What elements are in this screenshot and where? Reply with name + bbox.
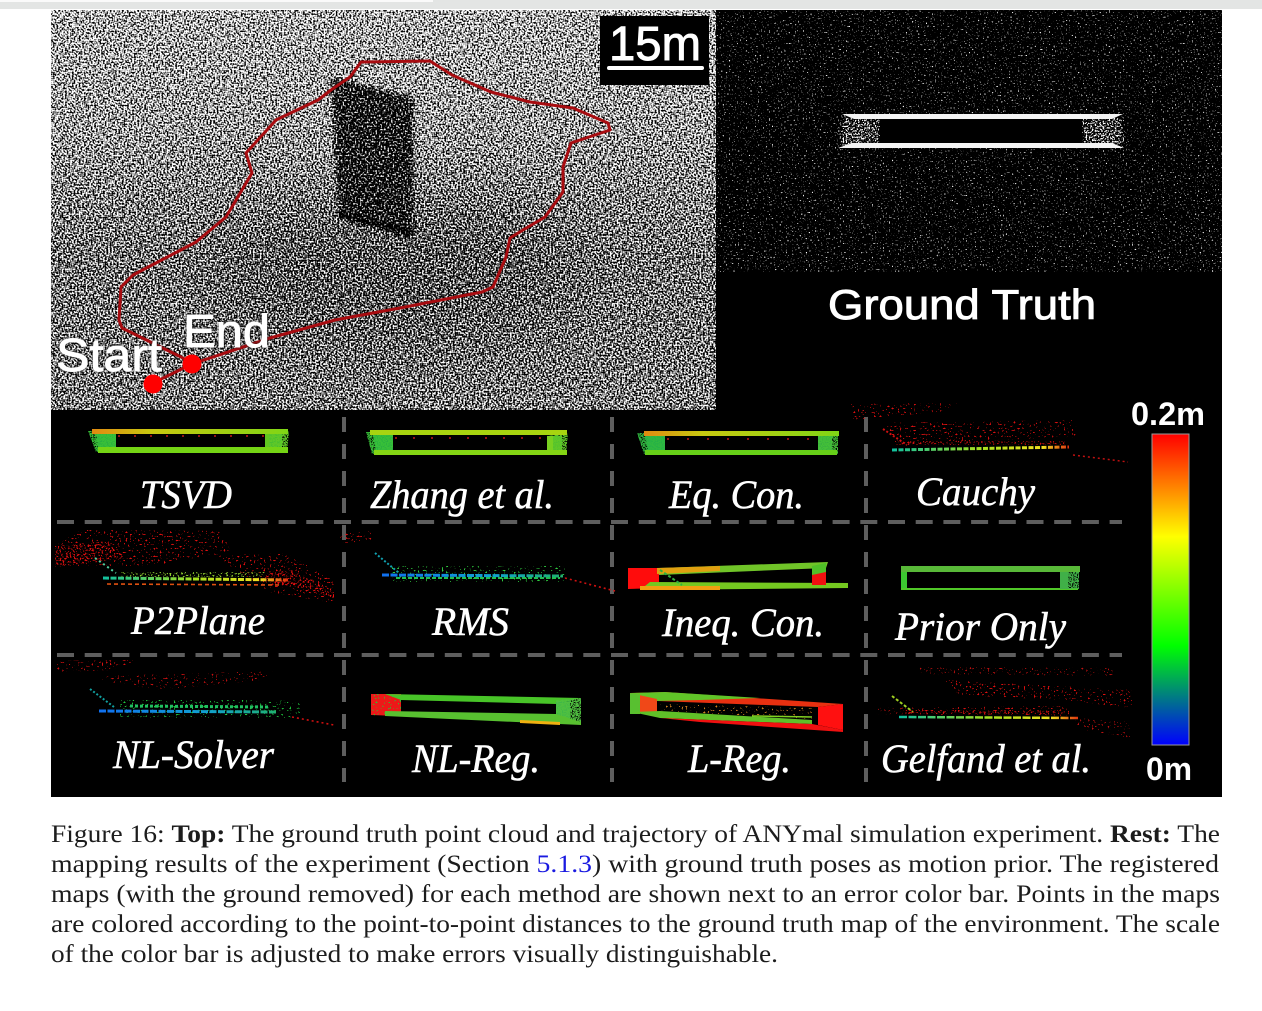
panel: ground truth top view (716, 10, 1222, 272)
label: L-Reg.: L-Reg. (687, 736, 791, 781)
figure caption: Figure 16: Top: The ground truth point cloud and trajectory of ANYmal simulation experiment. Rest: The (51, 821, 1220, 848)
method labels (112, 469, 1091, 781)
map: Eq. Con. (637, 431, 839, 455)
color bar top label: 0.2m (1131, 396, 1205, 432)
label: Ineq. Con.: Ineq. Con. (661, 600, 824, 645)
map: L-Reg. (630, 692, 843, 732)
map: Zhang et al. (366, 430, 568, 455)
label: Eq. Con.: Eq. Con. (668, 472, 804, 517)
map: Prior Only (901, 566, 1080, 590)
label: Zhang et al.: Zhang et al. (370, 472, 554, 517)
figure caption: of the color bar is adjusted to make errors visually distinguishable. (51, 941, 778, 968)
figure caption: are colored according to the point-to-point distances to the ground truth map of the environment. The scale (51, 911, 1220, 938)
label: Ground Truth: Ground Truth (828, 281, 1096, 328)
label: Start: Start (56, 329, 162, 381)
figure caption (51, 821, 1220, 968)
trajectory path (119, 61, 610, 383)
map: P2Plane (55, 530, 334, 603)
end marker (182, 354, 202, 374)
panel: black figure background (51, 10, 1222, 797)
label: Cauchy: Cauchy (916, 469, 1035, 514)
label: P2Plane: P2Plane (130, 598, 265, 643)
map: Cauchy (851, 403, 1128, 462)
figure caption: mapping results of the experiment (Section 5.1.3) with ground truth poses as motion prior. The registered (51, 851, 1220, 878)
color bar gradient (1152, 434, 1189, 745)
panel: simulated point cloud with trajectory (51, 10, 716, 410)
color bar legend (1131, 396, 1205, 787)
color bar bottom label: 0m (1146, 751, 1192, 787)
map: Ineq. Con. (628, 562, 848, 590)
label: End: End (183, 305, 270, 357)
figure caption: maps (with the ground removed) for each method are shown next to an error color bar. Points in the maps (51, 881, 1220, 908)
label: RMS: RMS (431, 599, 509, 644)
label: TSVD: TSVD (140, 472, 232, 517)
browser top strip (0, 0, 1262, 9)
map: RMS (340, 531, 615, 591)
label: NL-Reg.: NL-Reg. (411, 736, 540, 781)
map: NL-Reg. (371, 694, 581, 725)
label: Prior Only: Prior Only (894, 604, 1066, 649)
map: Gelfand et al. (875, 667, 1132, 738)
scale badge 15m (600, 16, 709, 85)
scale badge 15m: 15m (609, 18, 701, 71)
label: Gelfand et al.: Gelfand et al. (881, 736, 1091, 781)
ground truth wall outline (838, 114, 1124, 148)
map: NL-Solver (57, 660, 334, 725)
map: TSVD (88, 429, 289, 453)
start marker (144, 374, 162, 394)
label: NL-Solver: NL-Solver (112, 732, 274, 777)
grid divider lines (57, 417, 1122, 782)
